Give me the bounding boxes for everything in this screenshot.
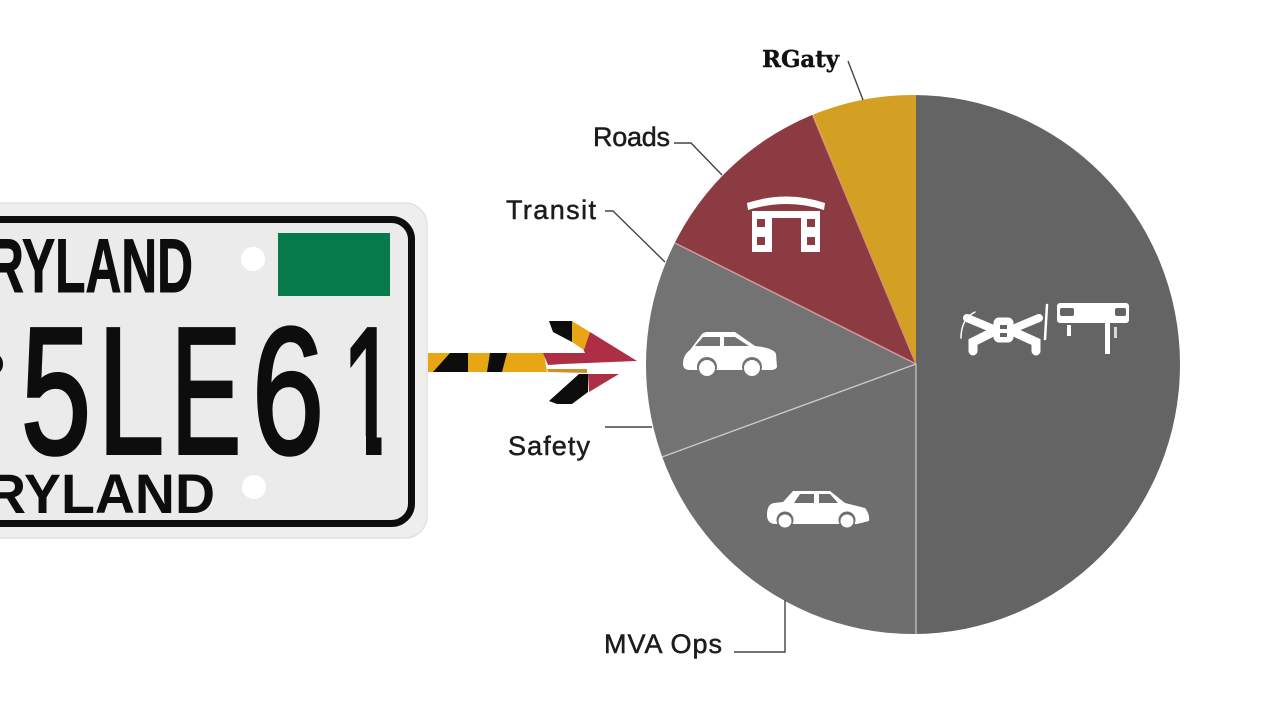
icon: drone — [961, 305, 1047, 351]
slice dividers — [662, 116, 916, 634]
plate number: 1 — [342, 291, 397, 492]
label: Roads — [593, 122, 722, 175]
label: Transit: Transit — [506, 195, 596, 225]
label: Rgaty: RGaty — [762, 46, 840, 73]
icon: sedan car — [767, 491, 869, 528]
slice: MVA main share — [916, 95, 1180, 634]
plate green sticker — [278, 233, 390, 296]
slice: Rgaty — [813, 95, 916, 362]
label: MVA Ops — [604, 600, 785, 659]
icon: sign gantry — [1057, 303, 1129, 354]
slice: Roads — [674, 114, 915, 363]
plate number: E — [171, 291, 241, 492]
slice: Transit and Safety — [646, 243, 914, 457]
plate mounting hole top — [241, 247, 265, 271]
chart: pie — [646, 95, 1180, 634]
plate number: L — [98, 291, 164, 492]
label: Transit — [506, 195, 665, 262]
icon: hatchback car — [683, 332, 777, 377]
plate mounting hole bottom — [242, 475, 266, 499]
label: Safety: Safety — [508, 431, 590, 461]
slice: MVA Ops — [662, 365, 916, 634]
infographic canvas — [0, 50, 1180, 659]
panel: license plate — [0, 203, 427, 538]
plate number: 5 — [21, 291, 91, 492]
label: Roads: Roads — [593, 122, 670, 152]
label: Rgaty — [762, 46, 863, 100]
arrow: Maryland flag pattern — [428, 321, 637, 404]
plate number — [0, 291, 404, 492]
icon: bridge building — [747, 196, 825, 252]
label: MVA Ops: MVA Ops — [604, 629, 722, 659]
plate number: 6 — [252, 291, 324, 492]
